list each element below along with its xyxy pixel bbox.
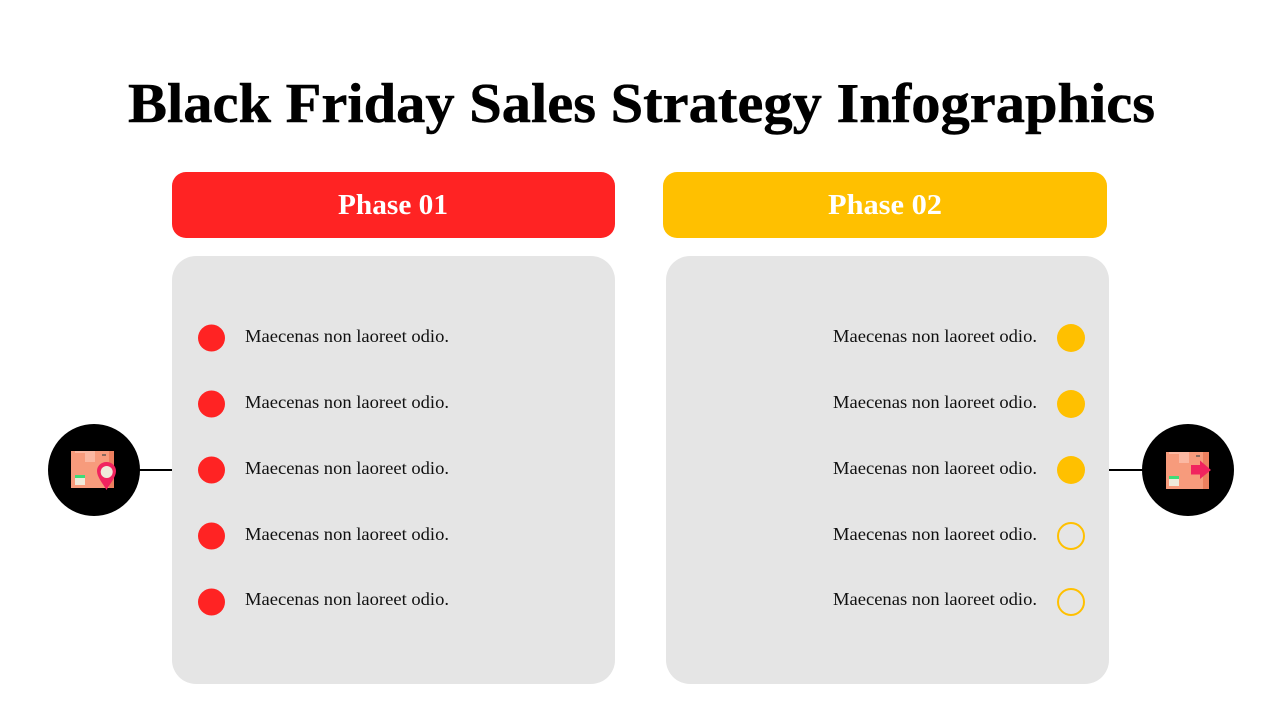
panel: phase 01 bbox=[172, 172, 615, 684]
phase 02 item 4 bbox=[833, 523, 1084, 549]
phase 01 item 2 bbox=[198, 390, 449, 418]
phase 02 item 5: Maecenas non laoreet odio. bbox=[833, 589, 1037, 609]
icon: package with arrow bbox=[1142, 424, 1234, 516]
phase 02 item 4: Maecenas non laoreet odio. bbox=[833, 524, 1037, 544]
phase 01 item 1: Maecenas non laoreet odio. bbox=[245, 326, 449, 346]
phase 02 item 3 bbox=[833, 456, 1085, 484]
connector: right icon to phase 02 bbox=[1109, 469, 1143, 471]
phase 01 item 2: Maecenas non laoreet odio. bbox=[245, 392, 449, 412]
phase 02 item 2 bbox=[833, 390, 1085, 418]
phase 01 item 3 bbox=[198, 456, 449, 484]
phase 01 item 1 bbox=[198, 324, 449, 352]
phase 01 item 4 bbox=[198, 522, 449, 550]
title: Black Friday Sales Strategy Infographics bbox=[128, 73, 1155, 135]
phase 01 item 3: Maecenas non laoreet odio. bbox=[245, 458, 449, 478]
phase 01 body card bbox=[172, 256, 615, 684]
phase 01 item 4: Maecenas non laoreet odio. bbox=[245, 524, 449, 544]
phase 01 header: Phase 01 bbox=[338, 189, 448, 221]
phase 02 item 5 bbox=[833, 589, 1084, 615]
phase 02 item 1 bbox=[833, 324, 1085, 352]
phase 02 header bbox=[663, 172, 1107, 238]
phase 01 item 5: Maecenas non laoreet odio. bbox=[245, 589, 449, 609]
phase 02 header: Phase 02 bbox=[828, 189, 942, 221]
phase 02 item 2: Maecenas non laoreet odio. bbox=[833, 392, 1037, 412]
connector: left icon to phase 01 bbox=[139, 469, 172, 471]
phase 01 item 5 bbox=[198, 588, 449, 616]
phase 02 item 1: Maecenas non laoreet odio. bbox=[833, 326, 1037, 346]
phase 01 header bbox=[172, 172, 615, 238]
icon: package with location pin bbox=[48, 424, 140, 516]
phase 02 body card bbox=[666, 256, 1109, 684]
panel: phase 02 bbox=[663, 172, 1109, 684]
phase 02 item 3: Maecenas non laoreet odio. bbox=[833, 458, 1037, 478]
